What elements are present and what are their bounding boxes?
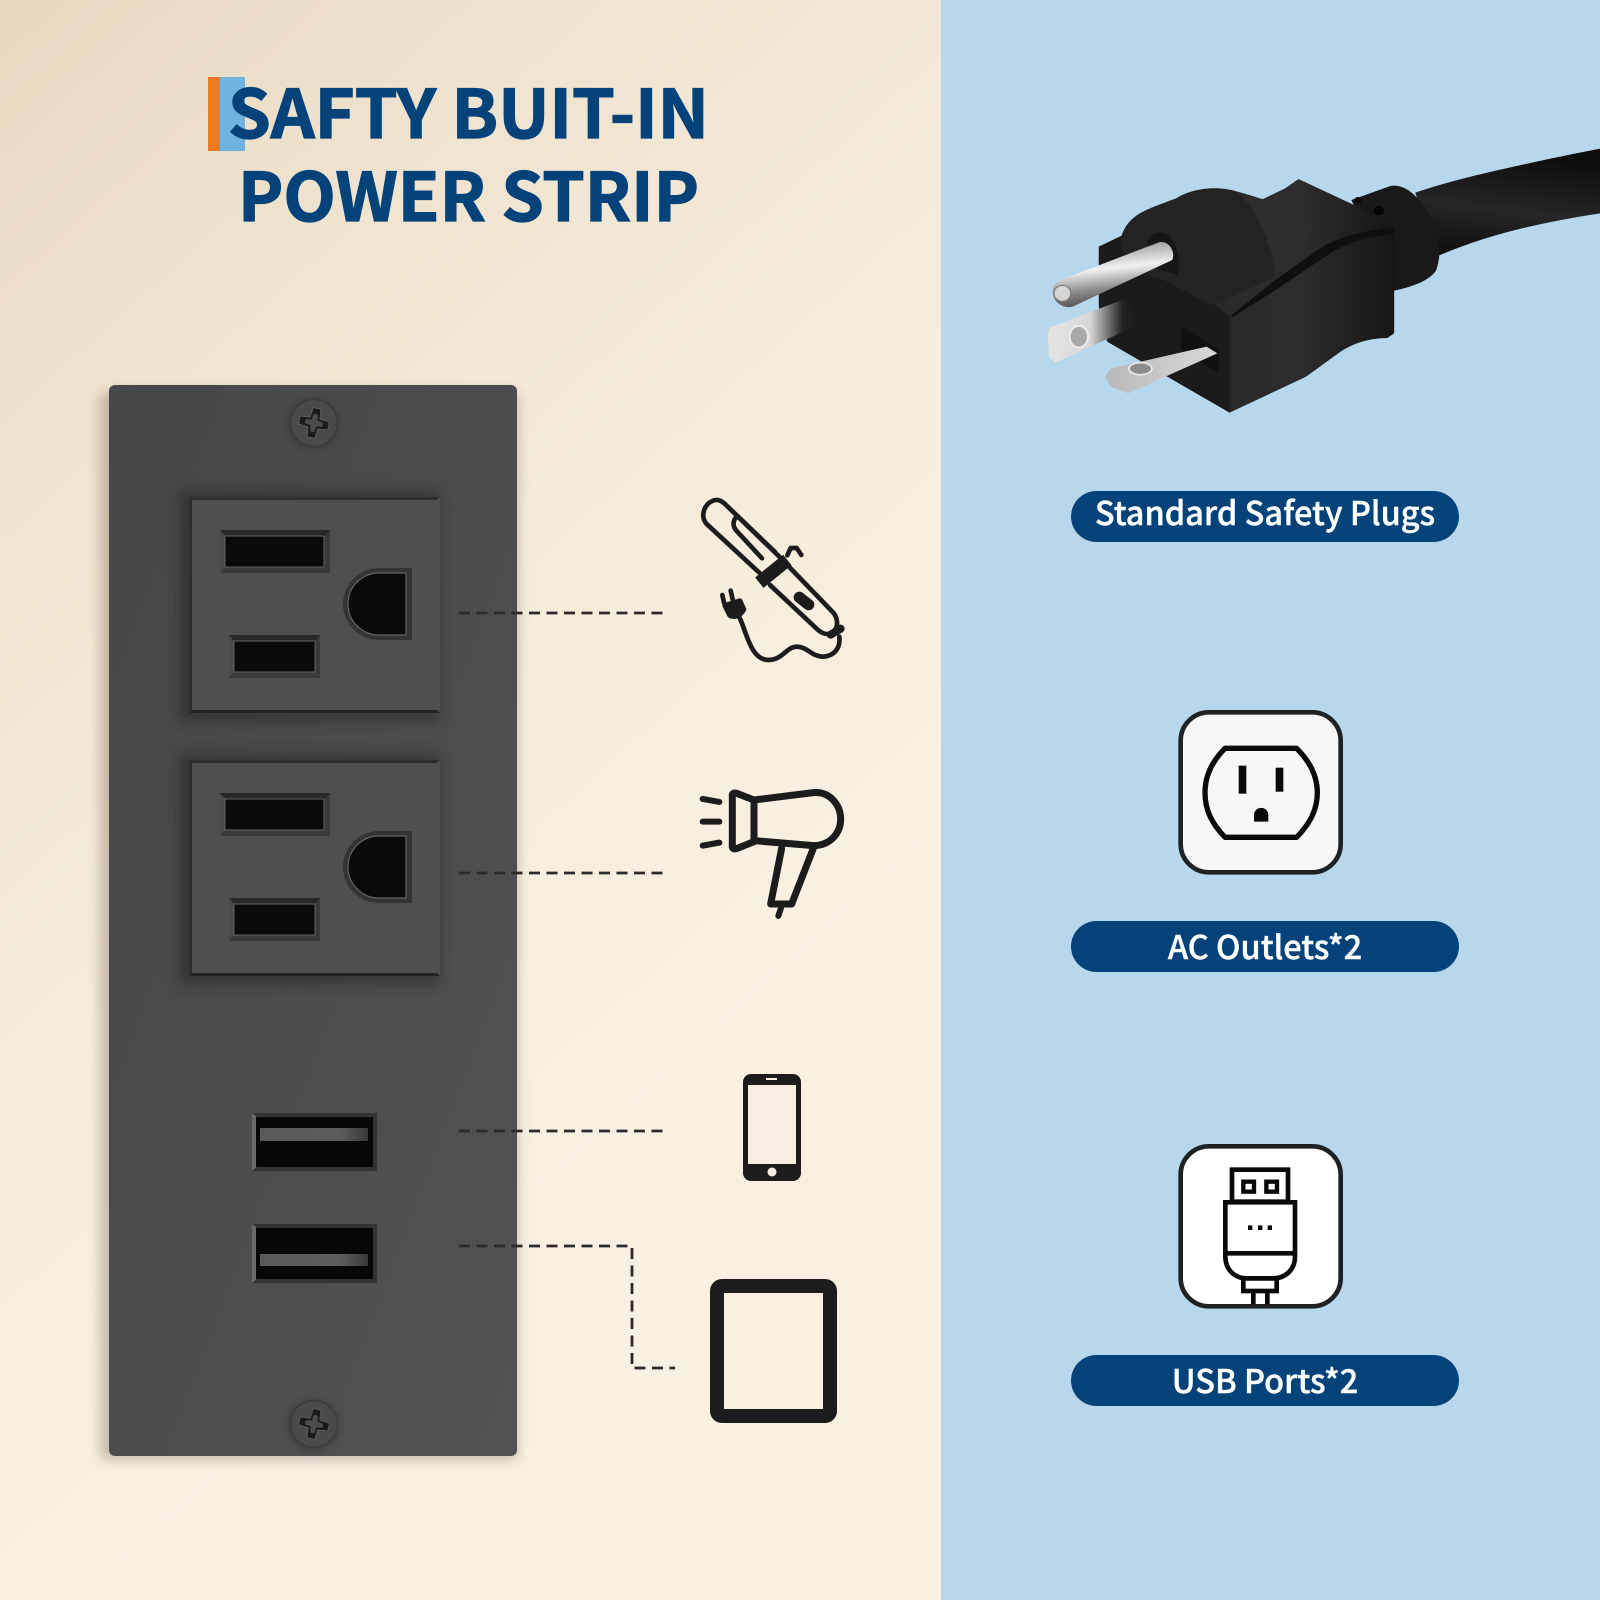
label pill: USB — [1071, 1355, 1459, 1406]
title block — [208, 61, 709, 241]
label pill: outlets — [1071, 921, 1459, 972]
icon: curling iron — [703, 500, 841, 660]
plug ground pin — [1053, 242, 1173, 307]
power strip plate — [100, 385, 518, 1460]
label pill: outlets: AC Outlets*2 — [1168, 922, 1362, 969]
plug ground housing — [1121, 188, 1312, 305]
icon: power plug — [1048, 149, 1600, 413]
screw: bottom — [287, 1399, 339, 1451]
outlet ground hole — [343, 568, 412, 640]
icon: smartphone — [743, 1074, 801, 1181]
plug blade right — [1105, 347, 1217, 393]
plug blade left — [1048, 298, 1142, 363]
plug cord — [1415, 149, 1600, 257]
screw: top — [287, 398, 339, 450]
plug body — [1153, 179, 1394, 413]
icon: tablet — [717, 1286, 830, 1416]
label pill: USB: USB Ports*2 — [1172, 1356, 1358, 1403]
label pill: plug: Standard Safety Plugs — [1095, 488, 1435, 535]
icon: USB connector — [1181, 1146, 1341, 1306]
outlet slot: bottom — [229, 898, 320, 941]
icon: hair dryer — [703, 793, 841, 916]
AC outlet 1 — [178, 490, 440, 722]
accent bar — [208, 77, 245, 151]
title text line 1: SAFTY BUIT-IN — [228, 61, 709, 158]
outlet slot: bottom — [229, 635, 320, 678]
outlet slot: top — [220, 530, 330, 573]
plug face — [1099, 233, 1230, 413]
panel: blue background — [941, 0, 1600, 1600]
dashed connectors — [459, 613, 675, 1368]
outlet slot: top — [220, 793, 330, 836]
plug strain relief — [1351, 186, 1440, 291]
icon: AC outlet — [1181, 712, 1341, 872]
AC outlet 2 — [178, 753, 440, 985]
USB port 2 — [252, 1224, 377, 1283]
panel: cream background — [0, 0, 941, 1600]
title text line 2: POWER STRIP — [238, 144, 699, 241]
USB port 1 — [252, 1113, 377, 1171]
plug top ridge — [1230, 227, 1394, 317]
outlet ground hole — [343, 831, 412, 903]
